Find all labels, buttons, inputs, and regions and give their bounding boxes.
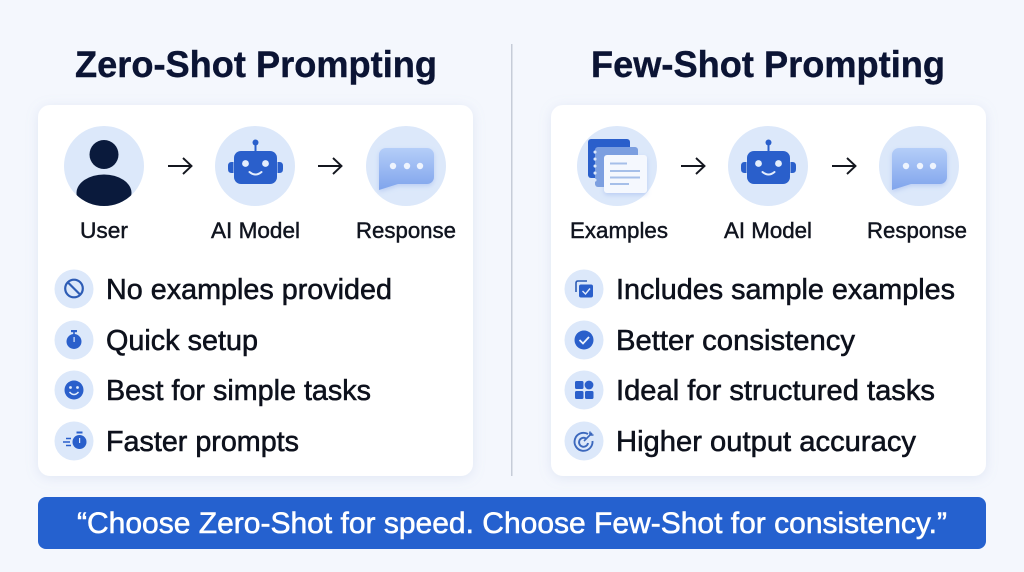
arrow: examples to model [681, 158, 704, 174]
icon: checked copies [564, 270, 604, 308]
text: sample examples: Includes sample examples [616, 274, 955, 306]
arrow: model to response [318, 158, 342, 174]
icon: AI model robot [215, 126, 295, 206]
icon: grid [564, 370, 604, 410]
icon: fast stopwatch [54, 422, 94, 460]
title: Zero-Shot Prompting: Zero-Shot Prompting [75, 43, 437, 85]
label: Response: Response [356, 218, 456, 243]
label: User: User [80, 218, 129, 243]
icon: response bubble [879, 126, 959, 206]
panel: few-shot [551, 105, 986, 476]
text: simple tasks: Best for simple tasks [106, 375, 371, 407]
icon: target [564, 422, 604, 460]
icon: no symbol [54, 270, 94, 308]
title: Few-Shot Prompting: Few-Shot Prompting [591, 43, 945, 85]
text: output accuracy: Higher output accuracy [616, 426, 917, 458]
icon: example documents [577, 126, 657, 206]
label: Response: Response [867, 218, 967, 243]
arrow: user to model [168, 158, 192, 174]
icon: response bubble [366, 126, 446, 206]
text: faster prompts: Faster prompts [106, 426, 299, 458]
label: Examples: Examples [570, 218, 668, 243]
label: AI Model: AI Model [724, 218, 812, 243]
banner: takeaway quote [38, 497, 986, 549]
icon: user [64, 126, 144, 212]
text: quick setup: Quick setup [106, 325, 258, 357]
label: AI Model: AI Model [211, 218, 300, 243]
text: better consistency: Better consistency [616, 325, 856, 357]
icon: smile [54, 370, 94, 410]
icon: AI model robot [728, 126, 808, 206]
text: no examples: No examples provided [106, 274, 392, 306]
text: structured tasks: Ideal for structured tasks [616, 375, 935, 407]
icon: check badge [564, 320, 604, 360]
panel: zero-shot [38, 105, 473, 476]
icon: stopwatch [54, 320, 94, 360]
text: quote: “Choose Zero-Shot for speed. Choose Few-Shot for consistency.” [77, 507, 947, 540]
arrow: model to response [832, 158, 856, 174]
